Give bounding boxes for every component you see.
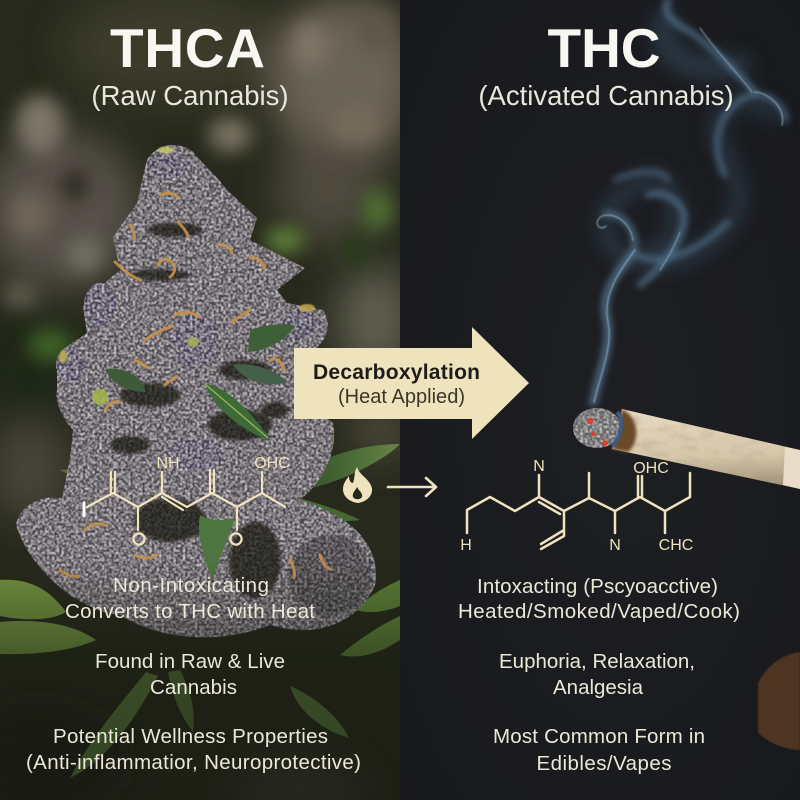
text block: THC benefits: Euphoria, Relaxation, xyxy=(499,650,695,673)
molecule label: CHC: CHC xyxy=(659,537,693,554)
molecule label: N top: N xyxy=(533,458,545,475)
molecule label: NH: NH xyxy=(156,455,180,472)
text block: THCA sources: Found in Raw & Live xyxy=(95,650,285,673)
subtitle: raw cannabis: (Raw Cannabis) xyxy=(91,80,289,111)
panel: raw cannabis background xyxy=(0,0,420,800)
text block: THCA effects: Converts to THC with Heat xyxy=(65,600,315,623)
text block: THCA sources xyxy=(95,650,285,699)
subtitle: activated cannabis: (Activated Cannabis) xyxy=(478,80,734,111)
text block: THCA wellness: Potential Wellness Properties xyxy=(53,725,328,748)
text block: THC common form: Most Common Form in xyxy=(493,725,705,748)
molecule: THCA structure xyxy=(84,470,285,545)
title: THCA: THCA xyxy=(110,17,265,79)
text block: THC benefits xyxy=(499,650,695,699)
text block: THCA sources: Cannabis xyxy=(150,676,237,699)
molecule label: OHC right: OHC xyxy=(633,460,669,477)
lower fade over bud xyxy=(0,560,400,800)
text block: THC common form: Edibles/Vapes xyxy=(536,752,672,775)
text block: THC effects: Heated/Smoked/Vaped/Cook) xyxy=(458,600,740,623)
illustration: cannabis bud xyxy=(0,145,400,800)
illustration: lit joint xyxy=(573,408,800,489)
text block: THCA wellness: (Anti-inflammatior, Neuroprotective) xyxy=(26,751,361,774)
molecule label: H: H xyxy=(460,537,472,554)
panel: activated cannabis background xyxy=(400,0,800,800)
text block: THCA effects xyxy=(65,574,315,623)
text block: THCA effects: Non-Intoxicating xyxy=(113,574,269,597)
molecule label: N bottom: N xyxy=(609,537,621,554)
text block: THC effects: Intoxacting (Pscyoacctive) xyxy=(477,575,718,598)
text block: THC benefits: Analgesia xyxy=(553,676,644,699)
text block: THCA wellness xyxy=(26,725,361,774)
molecule: THC structure xyxy=(467,473,690,549)
illustration: rising smoke xyxy=(593,0,786,403)
arrow sublabel: (Heat Applied) xyxy=(338,386,465,408)
illustration: background leaves xyxy=(0,444,400,778)
decoration: wooden object xyxy=(758,652,800,750)
icon: flame xyxy=(343,467,372,503)
arrow: flame to THC xyxy=(388,478,436,496)
arrow: decarboxylation xyxy=(294,327,529,439)
text block: THC common form xyxy=(493,725,705,775)
arrow label: Decarboxylation xyxy=(313,361,480,384)
title: THC: THC xyxy=(548,17,660,79)
molecule label: OHC: OHC xyxy=(254,455,290,472)
text block: THC effects xyxy=(458,575,740,623)
